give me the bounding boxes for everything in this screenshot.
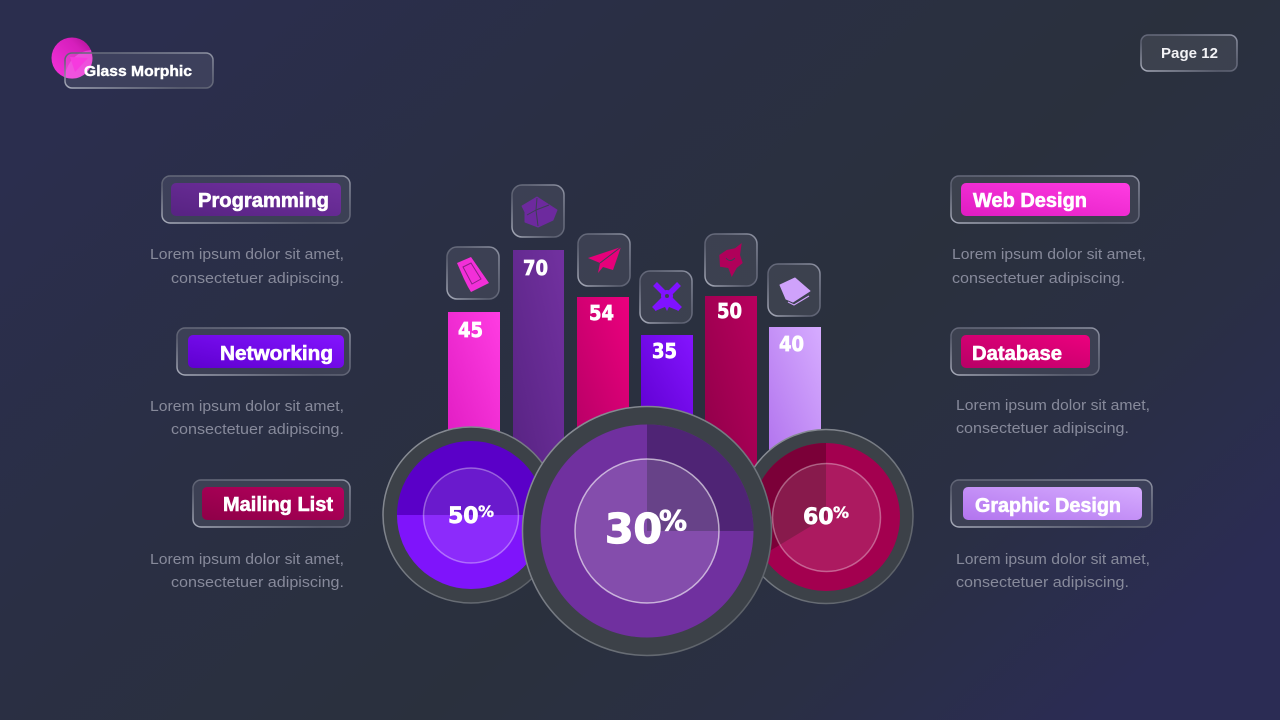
bar 54	[577, 297, 629, 437]
chart: 60% donut	[739, 430, 913, 604]
label: Networking: Networking	[220, 343, 333, 365]
page badge	[1141, 35, 1237, 71]
text: Mailing List description	[150, 551, 344, 591]
logo text: Glass Morphic	[84, 63, 192, 80]
label: Mailing List: Mailing List	[223, 494, 333, 516]
bar 54: 54	[589, 301, 614, 325]
icon: crossed tools	[640, 271, 692, 323]
chart: 30% donut: %	[659, 504, 687, 537]
bar 70: 70	[523, 256, 548, 280]
icon: book	[768, 264, 820, 316]
text: Networking description: consectetuer adipiscing.	[171, 421, 344, 438]
bar 35: 35	[652, 339, 677, 363]
bar 40	[769, 327, 821, 457]
logo badge	[52, 38, 213, 88]
label: Database: Database	[972, 343, 1062, 365]
text: Web Design description: consectetuer adipiscing.	[952, 270, 1125, 287]
text: Programming description: consectetuer adipiscing.	[171, 270, 344, 287]
text: Mailing List description: Lorem ipsum dolor sit amet,	[150, 551, 344, 568]
logo glass plate	[65, 53, 213, 88]
logo triangle	[70, 57, 88, 72]
chart: 50% donut: %	[478, 502, 494, 521]
icon: paper plane	[578, 234, 630, 286]
icon: box	[512, 185, 564, 237]
bar 50	[705, 296, 757, 476]
chart: 60% donut: 60	[803, 505, 834, 530]
chart: 50% donut	[383, 427, 559, 603]
chart: 50% donut: 50	[448, 504, 479, 529]
text: Database description: consectetuer adipiscing.	[956, 420, 1129, 437]
label: Programming	[162, 176, 350, 223]
chart: 60% donut: %	[833, 503, 849, 522]
panel: left labels	[150, 176, 350, 591]
text: Programming description: Lorem ipsum dolor sit amet,	[150, 246, 344, 263]
text: Graphic Design description	[956, 551, 1150, 591]
label: Mailing List	[193, 480, 350, 527]
bar 45	[448, 312, 500, 452]
text: Database description	[956, 397, 1150, 437]
page badge: Page 12	[1161, 45, 1218, 62]
text: Networking description	[150, 398, 344, 438]
bar 50: 50	[717, 299, 742, 323]
label: Networking	[177, 328, 350, 375]
text: Database description: Lorem ipsum dolor sit amet,	[956, 397, 1150, 414]
bar 35	[641, 335, 693, 425]
bar chart	[448, 250, 821, 480]
icon: ticket	[447, 247, 499, 299]
label: Programming: Programming	[198, 190, 329, 212]
bar 40: 40	[779, 332, 804, 356]
bar 45: 45	[458, 318, 483, 342]
text: Web Design description	[952, 246, 1146, 287]
text: Web Design description: Lorem ipsum dolor sit amet,	[952, 246, 1146, 263]
text: Networking description: Lorem ipsum dolor sit amet,	[150, 398, 344, 415]
bar 70	[513, 250, 564, 480]
label: Graphic Design: Graphic Design	[975, 495, 1121, 517]
text: Programming description	[150, 246, 344, 287]
label: Graphic Design	[951, 480, 1152, 527]
text: Graphic Design description: consectetuer adipiscing.	[956, 574, 1129, 591]
chart: 30% donut: 30	[605, 505, 662, 553]
chart: 30% donut	[522, 406, 772, 656]
logo circle	[52, 38, 93, 79]
text: Graphic Design description: Lorem ipsum dolor sit amet,	[956, 551, 1150, 568]
label: Web Design: Web Design	[973, 190, 1087, 212]
panel: right labels	[951, 176, 1152, 591]
text: Mailing List description: consectetuer adipiscing.	[171, 574, 344, 591]
icon: rocket	[705, 234, 757, 286]
label: Web Design	[951, 176, 1139, 223]
label: Database	[951, 328, 1099, 375]
